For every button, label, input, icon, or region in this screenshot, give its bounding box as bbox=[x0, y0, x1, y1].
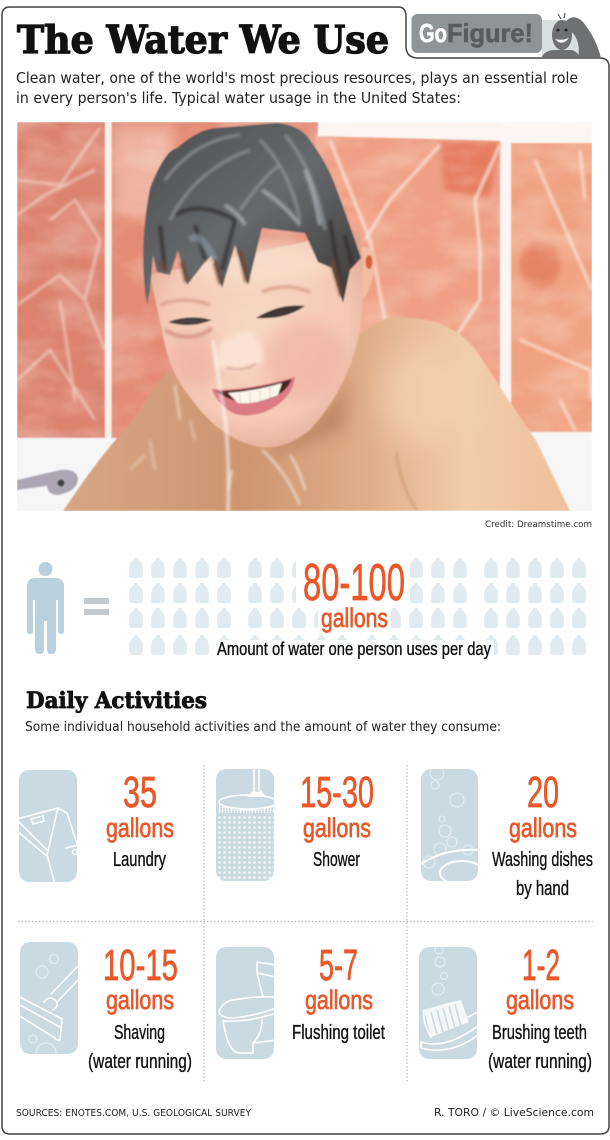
intro text: Clean water, one of the world's most precious resources, plays an essential role bbox=[16, 69, 578, 87]
wet hair bbox=[143, 123, 361, 305]
nose bbox=[216, 330, 262, 370]
intro text bbox=[16, 69, 578, 107]
icon: toothbrush bbox=[419, 946, 478, 1059]
activity: brushing teeth: 1-2 bbox=[522, 941, 560, 990]
activity: laundry: Laundry bbox=[113, 849, 166, 871]
sources: SOURCES: ENOTES.COM, U.S. GEOLOGICAL SURVEY bbox=[16, 1108, 251, 1119]
title: The Water We Use bbox=[17, 17, 389, 62]
bathtub edge bbox=[17, 432, 592, 511]
marble texture bbox=[17, 122, 592, 438]
eyes bbox=[160, 287, 310, 337]
activity: shaving: Shaving bbox=[114, 1022, 165, 1044]
activity: shower: 15-30 bbox=[300, 768, 374, 817]
photo credit: Credit: Dreamstime.com bbox=[485, 520, 592, 530]
ear bbox=[361, 246, 375, 298]
activity: flushing toilet bbox=[216, 941, 385, 1059]
smile bbox=[212, 377, 295, 416]
equals sign bbox=[84, 598, 109, 615]
icon: bubbles and plate bbox=[421, 769, 478, 881]
activity: flushing toilet: 5-7 bbox=[319, 941, 358, 990]
face bbox=[150, 230, 363, 447]
tile: left bbox=[17, 122, 105, 438]
daily use figure: 80-100 bbox=[303, 554, 405, 612]
icon: razor bbox=[20, 942, 78, 1054]
activity: laundry bbox=[17, 768, 174, 884]
activity: laundry: gallons bbox=[106, 813, 174, 843]
GoFigure logo: Figure! bbox=[447, 18, 533, 48]
activity: flushing toilet: Flushing toilet bbox=[292, 1022, 385, 1044]
tile: centre right bbox=[315, 122, 503, 387]
faucet bbox=[17, 470, 78, 495]
GoFigure logo: Go bbox=[419, 18, 447, 48]
photo: boy splashing water on his face bbox=[17, 122, 592, 511]
heading: Daily Activities: Daily Activities bbox=[26, 688, 207, 714]
icon: GoFigure mascot bbox=[541, 13, 601, 58]
activity: shower bbox=[216, 768, 374, 881]
water streams and droplets bbox=[130, 340, 305, 511]
activity: brushing teeth bbox=[419, 941, 592, 1073]
icon: person bbox=[27, 562, 64, 654]
icon: toilet bbox=[216, 947, 276, 1059]
activity: washing dishes: 20 bbox=[527, 768, 559, 817]
icon: shower head bbox=[216, 769, 277, 881]
activity: shaving: (water running) bbox=[88, 1051, 192, 1073]
activity: flushing toilet: gallons bbox=[305, 985, 373, 1015]
boy's shoulders and chest bbox=[63, 317, 570, 511]
tile: right bbox=[511, 143, 592, 432]
activity: shaving: gallons bbox=[106, 985, 174, 1015]
daily use figure: Amount of water one person uses per day bbox=[217, 639, 491, 659]
sub-heading text: Some individual household activities and the amount of water they consume: bbox=[25, 720, 501, 735]
activity: laundry: 35 bbox=[123, 768, 157, 817]
activity: shower: gallons bbox=[303, 813, 371, 843]
icon: shirt bbox=[17, 770, 79, 884]
activity: shaving bbox=[18, 941, 192, 1073]
tile: middle bbox=[111, 122, 326, 438]
activity: washing dishes bbox=[421, 766, 593, 900]
activity: washing dishes: gallons bbox=[509, 813, 577, 843]
daily use figure: gallons bbox=[321, 603, 388, 633]
activity: shower: Shower bbox=[313, 849, 360, 871]
daily use figure bbox=[214, 554, 494, 659]
activity: brushing teeth: gallons bbox=[506, 985, 574, 1015]
GoFigure logo bbox=[412, 13, 601, 58]
icon grid: water jugs bbox=[129, 558, 586, 655]
activity: washing dishes: by hand bbox=[516, 878, 569, 900]
byline: R. TORO / © LiveScience.com bbox=[434, 1106, 594, 1119]
intro text: in every person's life. Typical water usage in the United States: bbox=[16, 89, 461, 107]
activity: shaving: 10-15 bbox=[103, 941, 178, 990]
grout lines bbox=[106, 122, 501, 438]
